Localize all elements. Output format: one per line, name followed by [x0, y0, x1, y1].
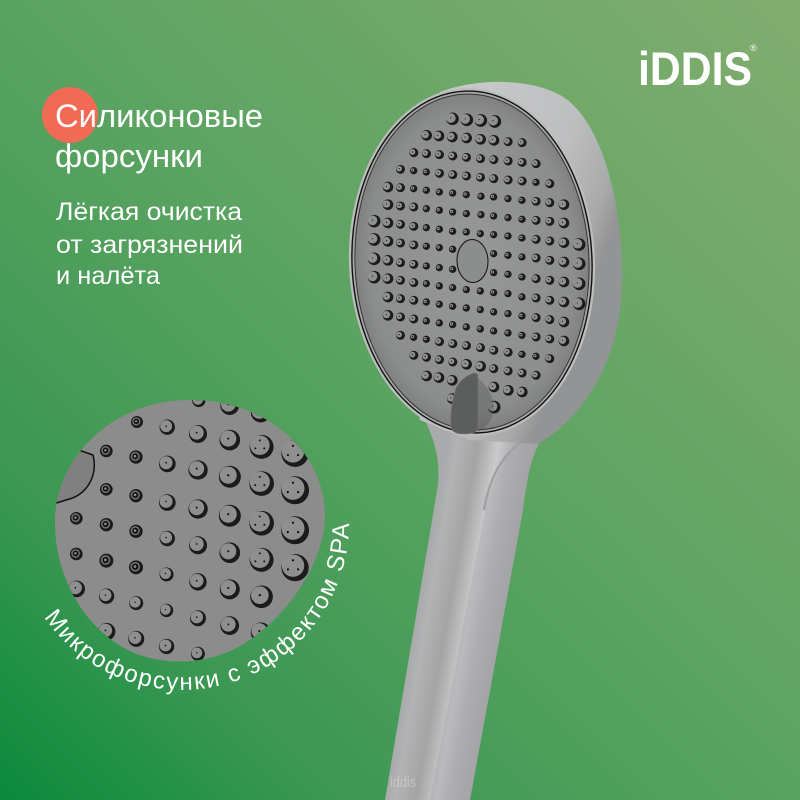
title: Силиконовые	[55, 98, 263, 134]
description text: и налёта	[56, 262, 160, 290]
shower head face	[342, 83, 602, 441]
description text: Лёгкая очистка	[56, 198, 242, 226]
handle engraved logo: iddis	[390, 774, 416, 791]
coral accent circle	[42, 87, 98, 143]
logo: iddis: iDDIS	[638, 42, 752, 95]
logo: iddis: ®	[750, 43, 757, 53]
nozzles on shower head	[368, 112, 585, 413]
description text: от загрязнений	[56, 231, 243, 259]
description text	[56, 198, 243, 290]
shower head body	[390, 82, 622, 444]
curved caption: Микрофорсунки с эффектом SPA	[45, 524, 350, 694]
title	[55, 98, 263, 174]
magnified nozzles	[68, 394, 309, 661]
magnified nozzle circle	[50, 394, 330, 670]
selector tab	[451, 373, 494, 434]
center button	[456, 239, 489, 283]
title: форсунки	[55, 138, 203, 174]
shower handle	[385, 415, 565, 800]
magnified center button	[56, 450, 96, 504]
